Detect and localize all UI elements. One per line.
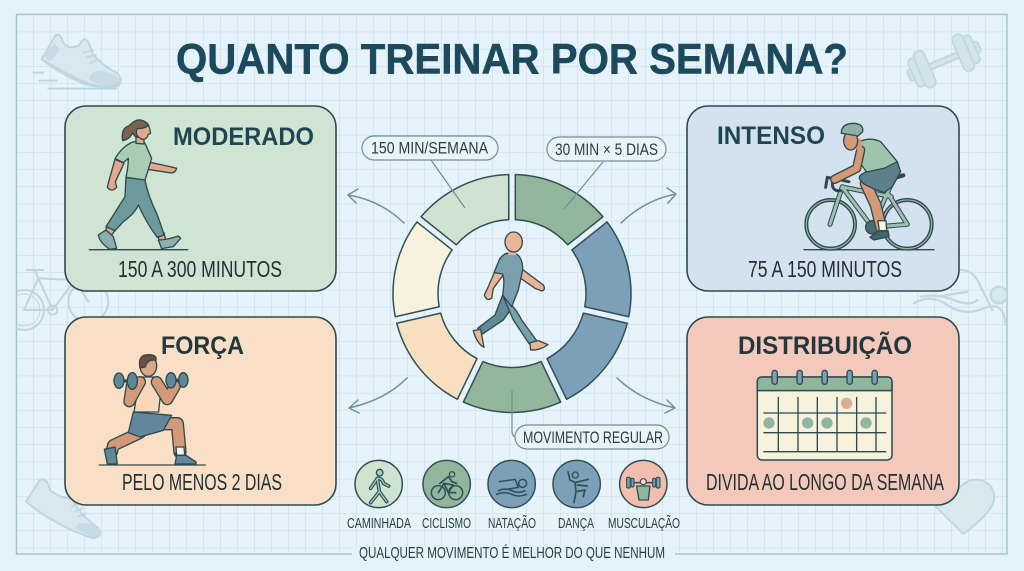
heading: forca: FORÇA: [161, 332, 244, 360]
heading: intenso: INTENSO: [717, 122, 825, 150]
title: QUANTO TREINAR POR SEMANA?: [176, 36, 848, 84]
icon: caminhada: CAMINHADA: [347, 516, 411, 532]
background icon: running shoe top left: [33, 35, 121, 89]
panel: forca: [65, 317, 336, 505]
background icon: heart bottom right: [936, 480, 994, 534]
panel: distribuicao: [687, 317, 959, 505]
callout: 30 min x 5 dias: 30 MIN × 5 DIAS: [555, 141, 658, 159]
arrow: to moderado: [348, 189, 404, 223]
icon: cyclist on road bike: [804, 123, 934, 250]
icon: ciclismo: CICLISMO: [422, 516, 471, 532]
icon: musculacao: [608, 460, 680, 532]
panel: intenso: [687, 106, 959, 291]
icon: natacao: [488, 460, 536, 532]
callout: movimento regular: MOVIMENTO REGULAR: [523, 429, 663, 447]
activity icons row: [347, 460, 680, 532]
text: 75 a 150 minutos: 75 A 150 MINUTOS: [748, 256, 902, 282]
icon: musculacao: MUSCULAÇÃO: [608, 515, 680, 532]
background icon: running shoe bottom left: [26, 479, 100, 538]
icon: woman walking: [89, 120, 188, 250]
text: 150 a 300 minutos: 150 A 300 MINUTOS: [118, 256, 282, 282]
arrow: to distribuicao: [617, 378, 675, 413]
callout: 150 min/semana: 150 MIN/SEMANA: [371, 140, 488, 158]
icon: central walking figure: [473, 232, 548, 350]
footer text: QUALQUER MOVIMENTO É MELHOR DO QUE NENHUM: [359, 545, 665, 562]
background icon: bicycle left: [4, 270, 108, 330]
icon: caminhada: [347, 460, 411, 532]
text: pelo menos 2 dias: PELO MENOS 2 DIAS: [122, 469, 282, 495]
panel: moderado: [65, 106, 336, 291]
icon: calendar: [757, 370, 892, 460]
chart: ring of seven segments: [376, 148, 662, 440]
heading: distribuicao: DISTRIBUIÇÃO: [738, 330, 912, 360]
callout: movimento regular: [512, 390, 669, 449]
icon: man lifting dumbbells: [99, 355, 205, 465]
heading: moderado: MODERADO: [173, 123, 314, 151]
background icon: dumbbell top right: [901, 28, 987, 94]
icon: danca: [553, 460, 600, 532]
icon: danca: DANÇA: [558, 516, 594, 532]
callout: 150 min/semana: [362, 136, 498, 208]
background icon: swimmer right: [914, 270, 1007, 325]
icon: ciclismo: [422, 460, 471, 532]
icon: natacao: NATAÇÃO: [488, 515, 536, 532]
arrow: to forca: [349, 378, 407, 413]
callout: 30 min x 5 dias: [547, 137, 666, 209]
arrow: to intenso: [621, 188, 676, 223]
